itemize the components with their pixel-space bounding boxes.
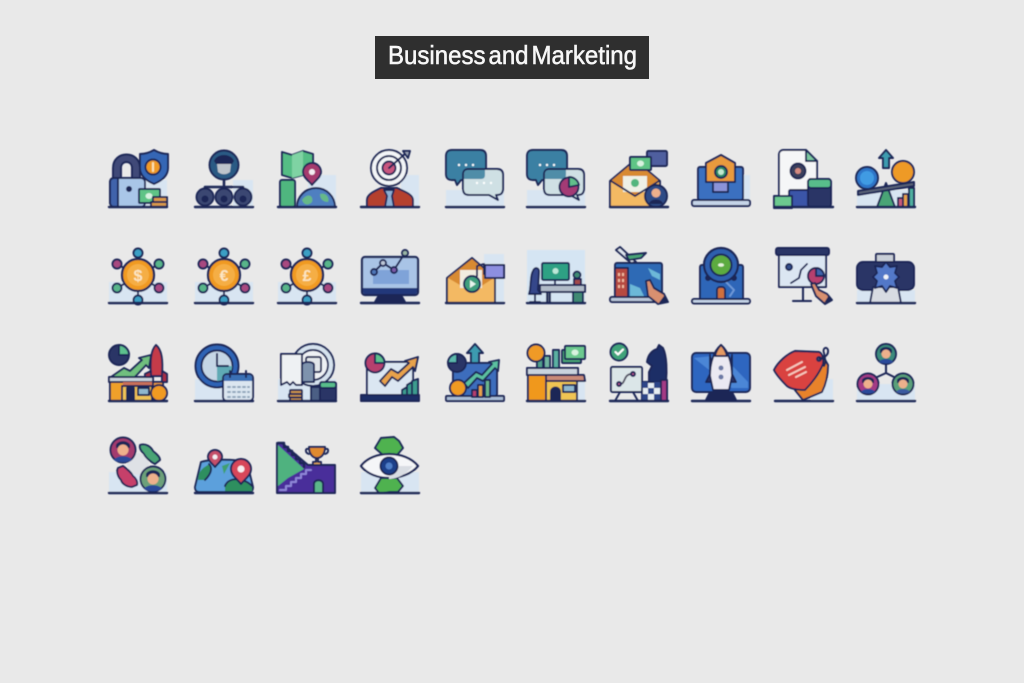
- icon: shop with coin and cash: [527, 344, 585, 401]
- icon: pound network: [278, 248, 336, 304]
- icon: price tag: [774, 348, 833, 401]
- icon: eye with recycling arrows: [361, 437, 419, 493]
- icon: target head businessperson: [361, 150, 419, 207]
- icon: chat bubbles: [446, 150, 504, 207]
- icon: receipt, rings and wallet: [278, 344, 336, 401]
- icon: store with rocket and growth: [109, 345, 167, 401]
- icon: laptop with rising arrow: [361, 354, 419, 401]
- icon: presentation board with hand: [776, 248, 832, 304]
- icon: desk workstation: [527, 250, 585, 303]
- icon: rocket on monitor: [692, 345, 750, 401]
- icon: monitor with line chart: [361, 250, 419, 303]
- icon: document with calculator and cash: [774, 150, 833, 208]
- icon: contacts exchange: [109, 438, 167, 493]
- icon: three people network: [857, 344, 915, 401]
- icon: euro network: €: [220, 268, 229, 285]
- icon: gear machine: [857, 254, 915, 303]
- icon: envelope with music and play: [446, 254, 504, 303]
- icon: team hierarchy: [195, 150, 253, 207]
- icon: world map with pins: [195, 450, 253, 493]
- icon: chat bubbles with pie chart: [527, 150, 585, 207]
- icon: tablet travel map: [610, 247, 668, 304]
- icon: euro network: [195, 248, 253, 304]
- icon: dollar network: [109, 248, 167, 304]
- icon: pound network: £: [303, 268, 312, 285]
- icon: laptop with growth and coin: [446, 344, 504, 401]
- icon: envelope with cash and card: [610, 151, 668, 207]
- icon: laptop with envelope: [692, 155, 750, 206]
- icon: map pin and globe: [278, 151, 336, 207]
- icon: currency balance scale: [856, 150, 915, 207]
- icon: clock and calendar: [195, 344, 253, 401]
- icon: stairs to trophy: [277, 443, 335, 493]
- icon: magnifier on laptop: [692, 248, 750, 304]
- icon: chess strategy board: [610, 344, 668, 401]
- icon grid: [109, 150, 915, 493]
- icon: dollar network: $: [134, 268, 143, 285]
- icon: padlock with shield: [109, 150, 168, 207]
- title: [375, 36, 649, 79]
- title: Business and Marketing: [388, 40, 637, 70]
